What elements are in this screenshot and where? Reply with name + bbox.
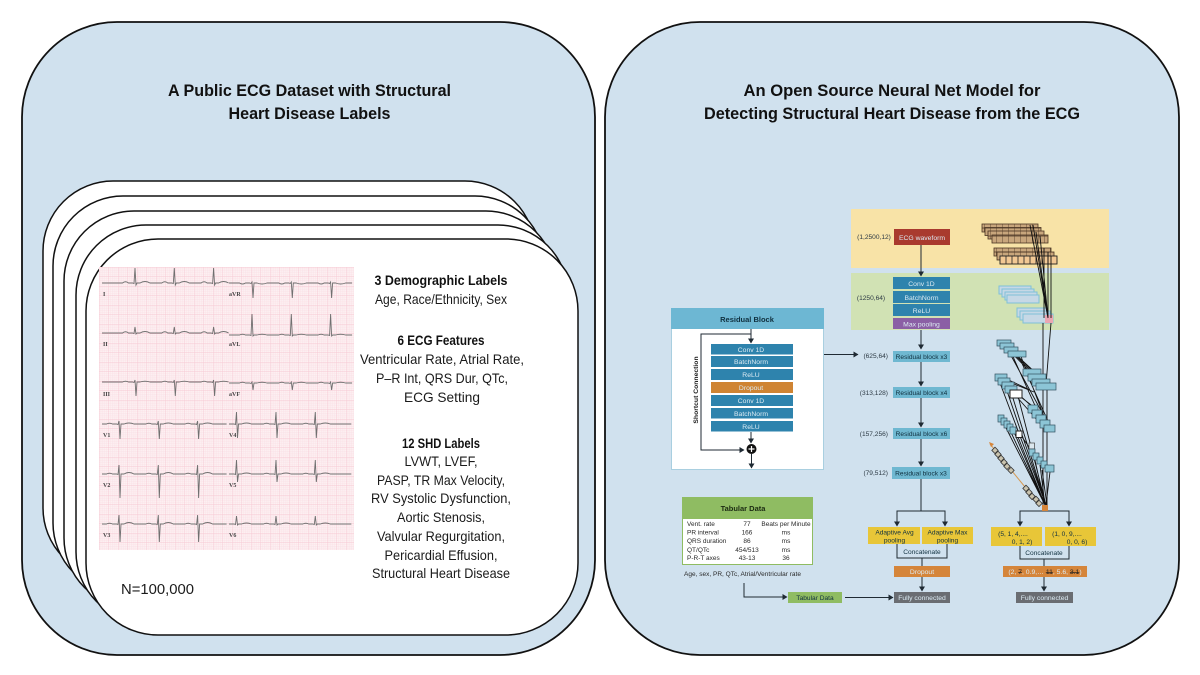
model output head: left: Fully connected — [898, 595, 946, 602]
model output head: left — [868, 479, 973, 603]
input block: (1,2500,12) — [857, 234, 891, 241]
network architecture schematic — [982, 224, 1057, 511]
panel: tabular data: ms — [782, 547, 791, 554]
residual block stages: (313,128) — [860, 390, 888, 397]
title: model: An Open Source Neural Net Model for — [744, 82, 1041, 100]
text: SHD labels: Pericardial Effusion, — [384, 547, 498, 563]
panel: tabular data: PR interval — [687, 530, 719, 536]
text: ECG features: Ventricular Rate, Atrial Rate, — [360, 351, 524, 367]
yellow input band — [851, 209, 1109, 268]
stacked record cards — [43, 181, 578, 635]
model output head: right: (2, 7, 0.9,… 11, 5.6, 3.1) — [1008, 569, 1082, 576]
ECG tracing image: V2 — [103, 483, 110, 489]
text: SHD labels: Aortic Stenosis, — [397, 509, 485, 525]
first convolution block: BatchNorm — [904, 295, 939, 302]
model output head: right: 0, 0, 6) — [1067, 539, 1087, 546]
text: SHD labels: 12 SHD Labels — [402, 436, 480, 452]
green first-layer band — [851, 273, 1109, 330]
ECG tracing image: V4 — [229, 433, 236, 439]
model output head: left: pooling — [937, 538, 958, 544]
arrow and tabular data box — [744, 583, 893, 603]
text: SHD labels: LVWT, LVEF, — [404, 453, 478, 469]
model output head: left: Concatenate — [903, 549, 941, 556]
panel: tabular data: 86 — [743, 538, 751, 545]
residual block stages: (157,256) — [860, 431, 888, 438]
first convolution block — [857, 277, 950, 349]
panel: neural net model — [605, 22, 1179, 655]
second layer group — [997, 340, 1056, 390]
text: ECG features: P–R Int, QRS Dur, QTc, — [376, 370, 508, 386]
text: SHD labels: PASP, TR Max Velocity, — [377, 472, 505, 488]
input kernels — [982, 224, 1057, 264]
panel: tabular data: QRS duration — [687, 538, 727, 545]
panel: tabular data: Beats per Minute — [761, 521, 811, 528]
panel: tabular data: 36 — [782, 555, 790, 562]
model output head: right — [991, 509, 1096, 603]
panel: tabular data — [682, 497, 813, 564]
ECG tracing image: V3 — [103, 533, 110, 539]
panel: residual block: ReLU — [742, 424, 760, 431]
title: model: Detecting Structural Heart Disease from the ECG — [704, 105, 1080, 123]
panel: public ECG dataset — [22, 22, 595, 655]
sample size: N=100,000 — [121, 582, 194, 598]
panel: residual block — [671, 308, 824, 470]
residual block stages: Residual block x6 — [896, 431, 948, 438]
title: model — [704, 82, 1080, 123]
model output head: right: Fully connected — [1021, 595, 1069, 602]
model output head: left: Dropout — [910, 569, 934, 576]
final feature vectors and orange arrow — [989, 442, 1048, 511]
input block — [857, 229, 950, 276]
ECG tracing image — [99, 267, 354, 550]
title: dataset — [168, 82, 451, 123]
panel: residual block: BatchNorm — [734, 411, 768, 418]
panel: tabular data: 77 — [743, 521, 751, 528]
residual block stages: Residual block x4 — [896, 390, 948, 397]
ECG tracing image: V5 — [229, 483, 236, 489]
first layer feature maps — [999, 286, 1053, 323]
panel: tabular data: QT/QTc — [687, 547, 710, 554]
first convolution block: ReLU — [913, 308, 930, 315]
panel: residual block: Conv 1D — [738, 347, 764, 354]
text: demographic labels: 3 Demographic Labels — [374, 273, 508, 289]
residual block stages: Residual block x3 — [895, 470, 947, 478]
arrow: residual block detail to stage — [824, 354, 858, 356]
first convolution block: Conv 1D — [908, 281, 935, 288]
arrow and tabular data box: Tabular Data — [796, 595, 834, 602]
panel: tabular data: 43-13 — [739, 555, 756, 562]
panel: residual block: BatchNorm — [734, 359, 768, 366]
text: ECG features — [360, 333, 524, 405]
model output head: left: Adaptive Avg — [875, 530, 914, 536]
panel: tabular data: ms — [782, 538, 791, 545]
ECG tracing image: I — [103, 292, 106, 298]
ECG tracing image: V6 — [229, 533, 236, 539]
panel: residual block: Residual Block — [720, 315, 775, 324]
text: demographic labels — [374, 273, 508, 307]
panel: tabular data: P-R-T axes — [687, 555, 720, 562]
ECG tracing image: III — [103, 392, 111, 398]
title: dataset: Heart Disease Labels — [228, 105, 390, 123]
text: SHD labels: Valvular Regurgitation, — [377, 528, 505, 544]
residual block stages: Residual block x3 — [896, 354, 948, 361]
residual block stages: (625,64) — [863, 353, 888, 360]
tabular input caption: Age, sex, PR, QTc, Atrial/Ventricular rate — [684, 571, 801, 578]
ECG tracing image: aVR — [229, 292, 241, 298]
input block: ECG waveform — [899, 235, 945, 242]
panel: tabular data: 454/513 — [735, 547, 759, 554]
model output head: left: Adaptive Max — [928, 530, 968, 536]
first convolution block: (1250,64) — [857, 295, 885, 302]
ECG tracing image: aVF — [229, 392, 240, 398]
residual block stages: (79,512) — [863, 470, 888, 477]
panel: tabular data: Vent. rate — [687, 521, 715, 528]
model output head: right: 0, 1, 2) — [1012, 539, 1032, 546]
fourth layer group — [998, 415, 1054, 472]
panel: residual block: Conv 1D — [738, 398, 764, 405]
text: ECG features: ECG Setting — [404, 389, 480, 405]
third layer group — [995, 374, 1055, 432]
text: SHD labels — [371, 436, 511, 581]
text: SHD labels: RV Systolic Dysfunction, — [371, 490, 511, 506]
title: dataset: A Public ECG Dataset with Structural — [168, 82, 451, 100]
ECG tracing image: aVL — [229, 342, 240, 348]
connecting lines — [1030, 225, 1051, 505]
panel: residual block: ReLU — [742, 372, 760, 379]
ECG tracing image: II — [103, 342, 108, 348]
model output head: right: (5, 1, 4,.... — [998, 531, 1028, 538]
panel: residual block: Shortcut Connection — [693, 356, 700, 424]
text: ECG features: 6 ECG Features — [398, 333, 485, 349]
model output head: right: (1, 0, 9,.... — [1052, 531, 1082, 538]
text: SHD labels: Structural Heart Disease — [372, 565, 510, 581]
ECG tracing image: V1 — [103, 433, 110, 439]
residual block stages — [860, 351, 950, 479]
model output head: right: Concatenate — [1025, 550, 1063, 557]
panel: tabular data: Tabular Data — [721, 504, 766, 513]
panel: residual block: Dropout — [739, 385, 763, 392]
model output head: left: pooling — [884, 538, 905, 544]
text: demographic labels: Age, Race/Ethnicity, Sex — [375, 291, 507, 307]
first convolution block: Max pooling — [903, 322, 940, 328]
panel: tabular data: 166 — [742, 530, 753, 536]
panel: tabular data: ms — [782, 530, 791, 536]
